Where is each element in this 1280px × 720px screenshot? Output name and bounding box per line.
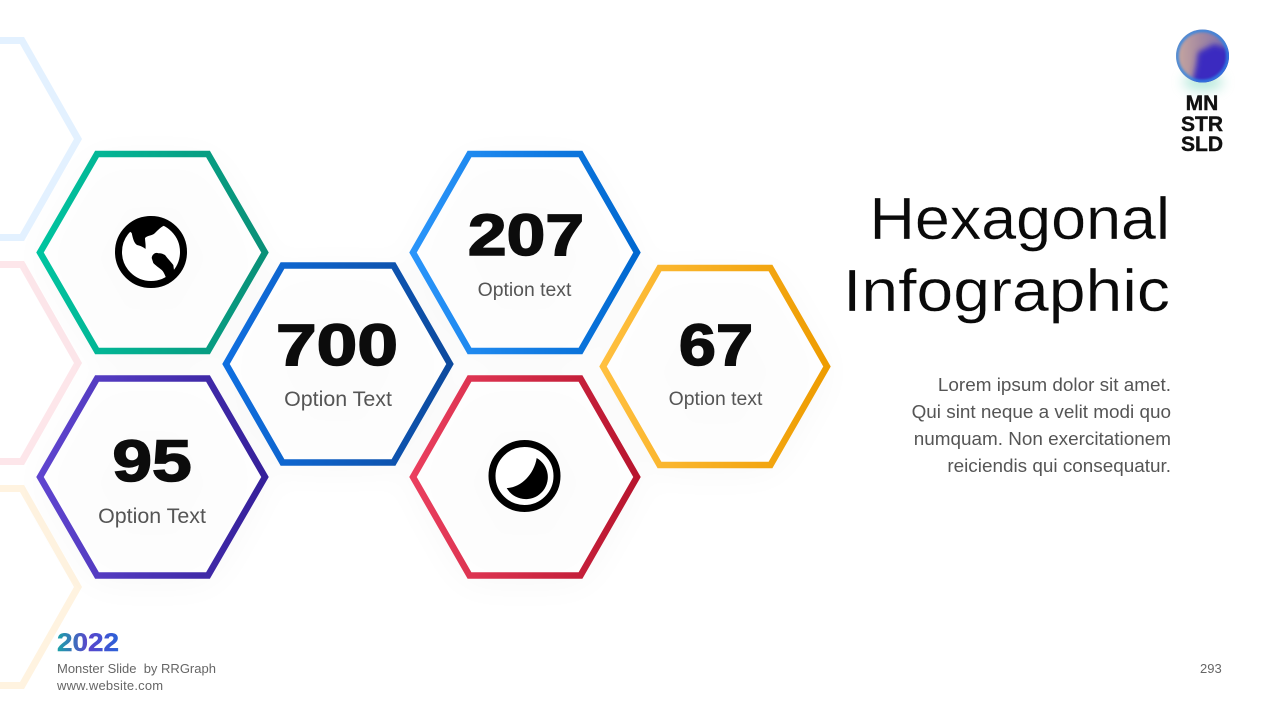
footer credits — [57, 661, 216, 692]
hexagon soft shadows — [40, 160, 827, 582]
body text: Qui sint neque a velit modi quo — [912, 402, 1171, 423]
number: 207: 207 — [467, 203, 584, 268]
year: 2022 — [57, 629, 119, 657]
caption: 700: Option Text — [284, 387, 392, 411]
logo sphere — [1176, 30, 1240, 91]
hexagon: globe (green) — [40, 154, 265, 351]
body text — [912, 375, 1171, 477]
page number: 293 — [1200, 661, 1222, 676]
logo text: SLD — [1181, 133, 1223, 156]
footer credits: Monster Slide by RRGraph — [57, 661, 216, 676]
hexagon: moon (red) — [413, 378, 637, 576]
body text: numquam. Non exercitationem — [914, 429, 1171, 450]
number: 67: 67 — [679, 313, 753, 378]
icon: moon — [492, 444, 557, 508]
title: Hexagonal — [869, 186, 1170, 252]
number: 700: 700 — [276, 312, 397, 378]
caption: 67: Option text — [669, 388, 762, 410]
hexagon: 95 (purple) — [40, 378, 265, 576]
hexagon: 700 (blue) — [226, 266, 450, 462]
caption: 95: Option Text — [98, 504, 206, 528]
caption: 207: Option text — [478, 279, 571, 301]
title — [843, 186, 1170, 324]
icon: globe — [118, 216, 184, 284]
title: Infographic — [843, 258, 1170, 324]
number: 95: 95 — [112, 428, 191, 494]
hexagon: 207 (light blue) — [413, 154, 637, 351]
logo text — [1181, 92, 1223, 156]
decorative background hexagons — [0, 40, 78, 686]
body text: Lorem ipsum dolor sit amet. — [938, 375, 1171, 396]
logo text: MN — [1186, 92, 1218, 115]
footer credits: www.website.com — [57, 678, 163, 692]
hexagon: 67 (amber) — [603, 268, 827, 465]
body text: reiciendis qui consequatur. — [947, 456, 1171, 477]
logo text: STR — [1181, 112, 1223, 136]
